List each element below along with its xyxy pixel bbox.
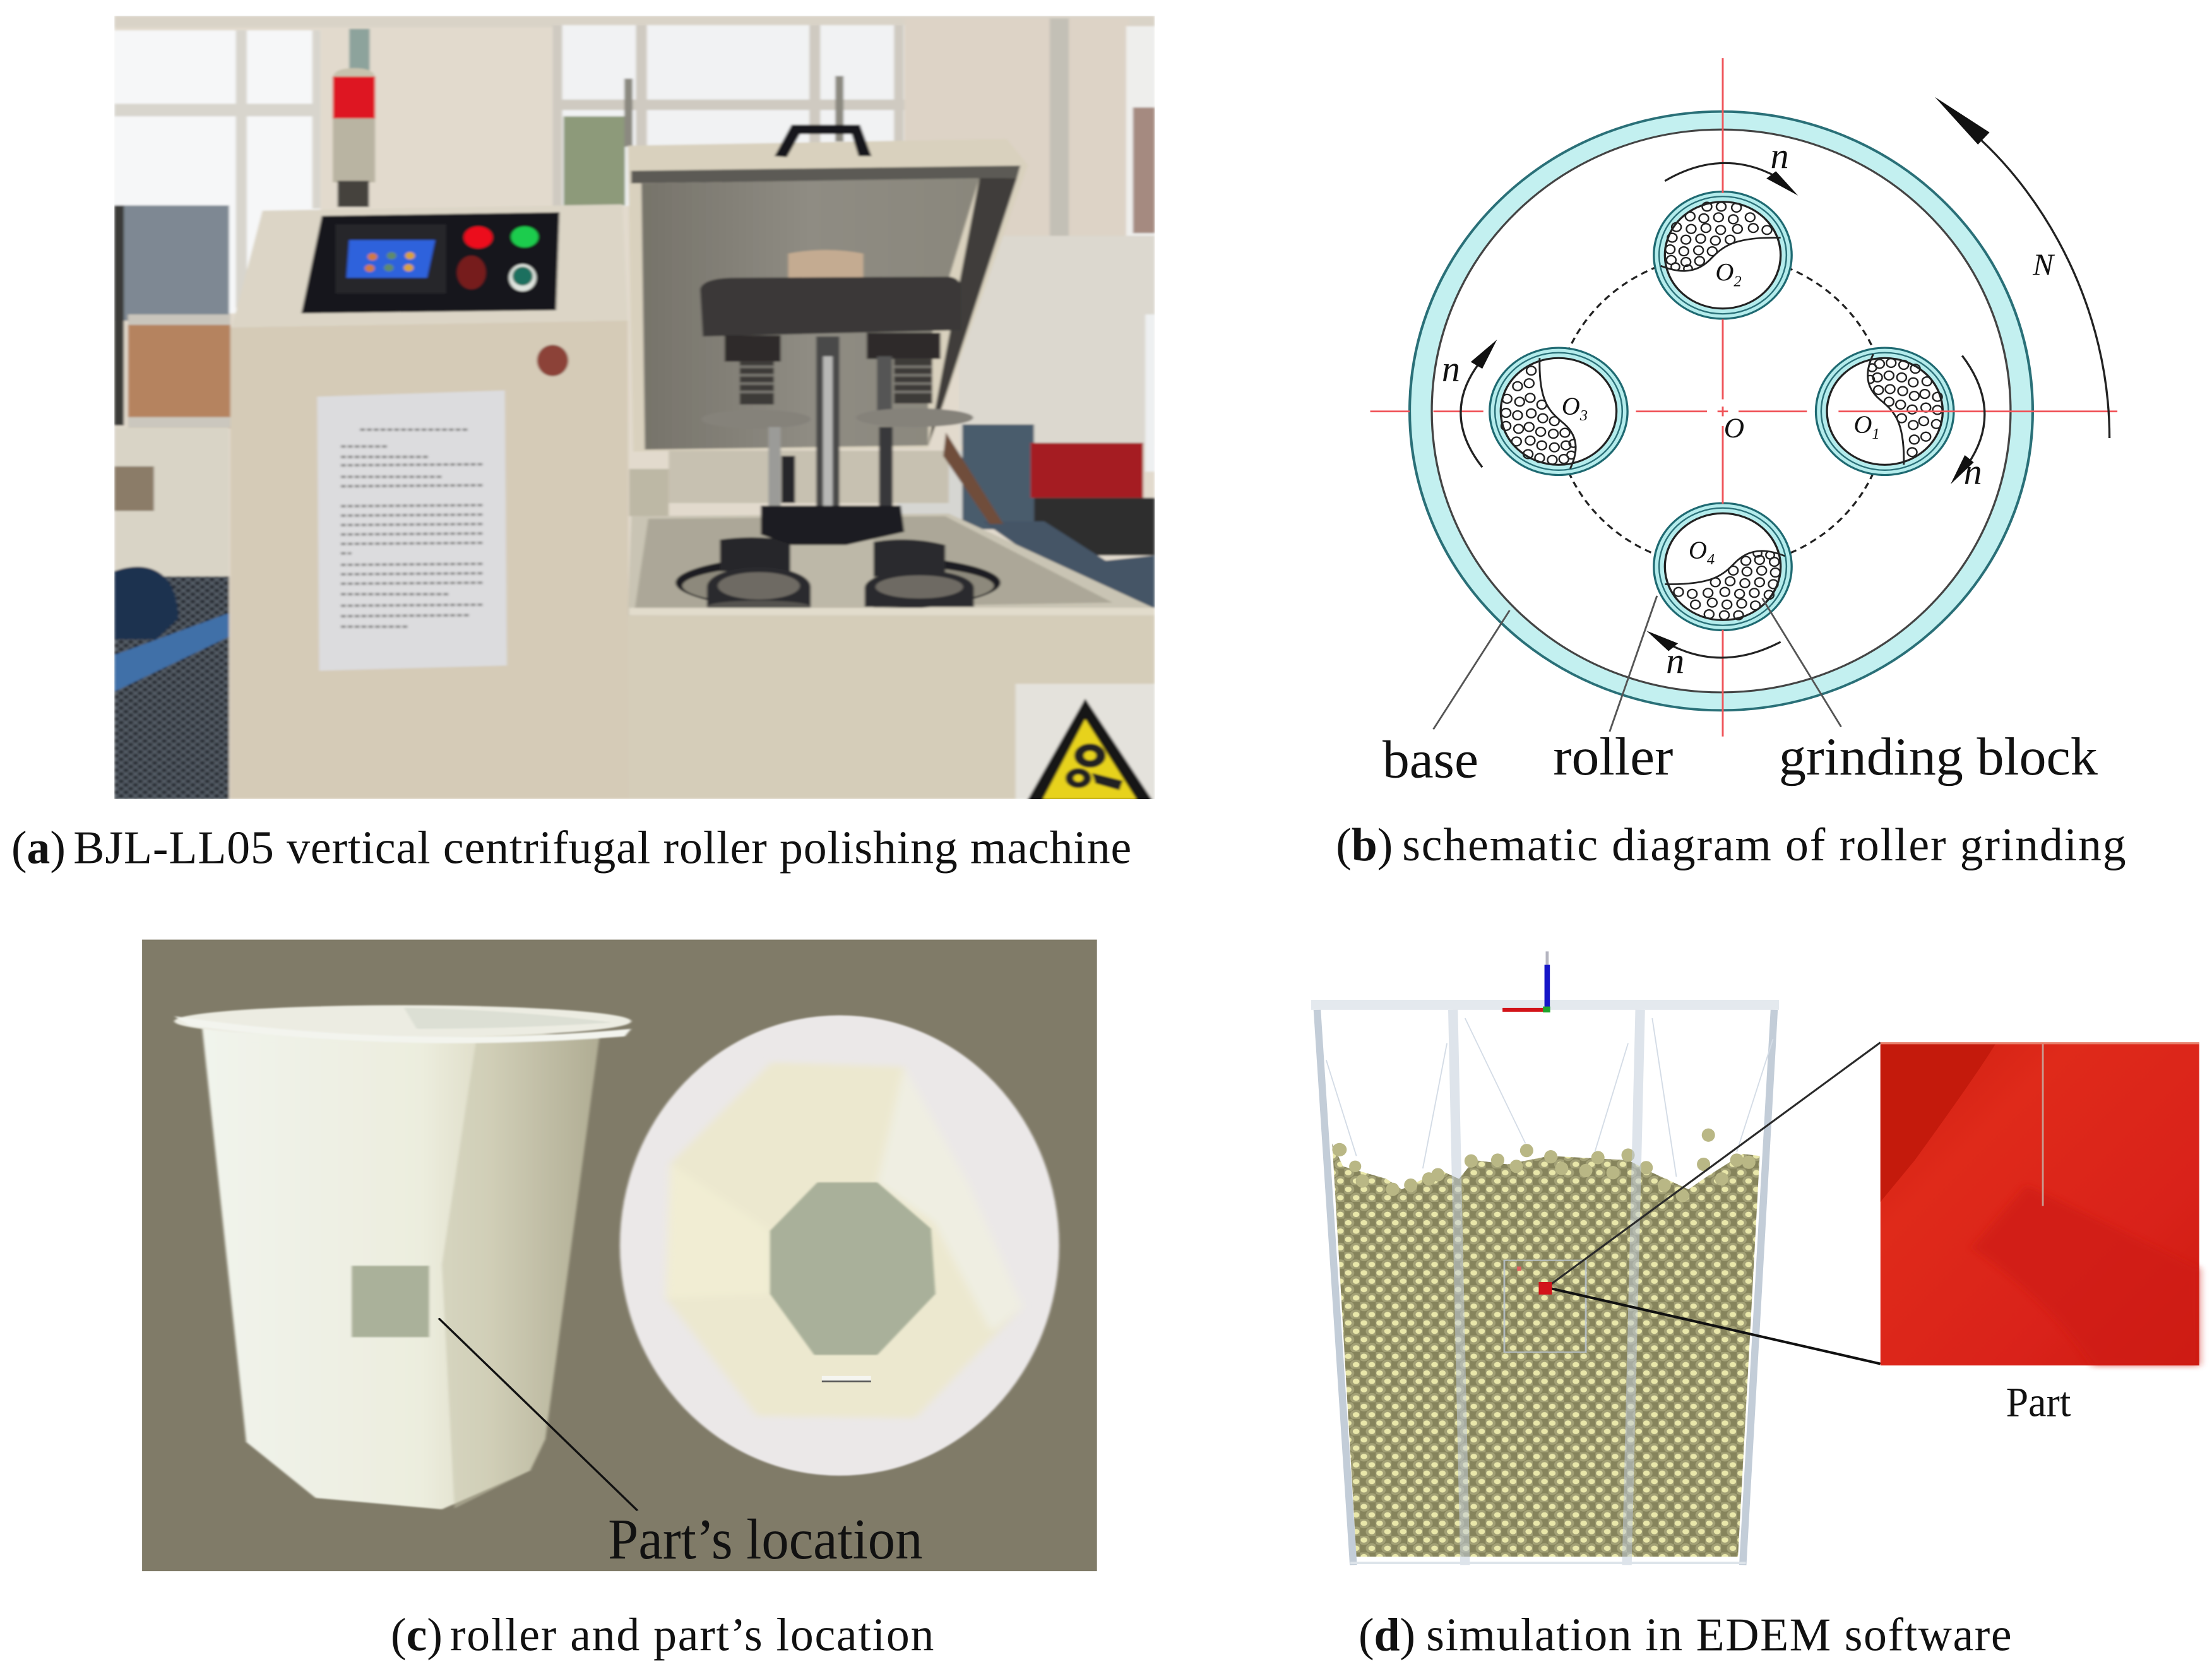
diagram symbols: O	[1715, 258, 1733, 287]
panel a: photo of polishing machine	[114, 16, 1155, 802]
right wall and window	[904, 18, 1129, 239]
grinding media	[1332, 1129, 1760, 1557]
container wireframe	[1311, 1005, 1779, 1565]
polishing head	[788, 250, 864, 278]
coordinate axes	[1502, 951, 1550, 1012]
left window	[114, 30, 321, 313]
diagram symbols: O	[1562, 392, 1580, 420]
caption d: simulation in EDEM software	[1426, 1608, 2012, 1660]
diagram symbols: 1	[1872, 425, 1880, 442]
diagram symbols: 2	[1733, 273, 1742, 290]
roller top view	[620, 1016, 1059, 1476]
lid	[627, 139, 1028, 452]
tray and rollers	[627, 514, 1153, 617]
leader line	[439, 1318, 638, 1511]
diagram symbols: O	[1689, 536, 1707, 564]
diagram symbols: n	[1964, 451, 1982, 492]
caption b: schematic diagram of roller grinding	[1402, 819, 2126, 870]
panel c: roller and part location photo	[142, 940, 1097, 1571]
caption d: (d)	[1359, 1608, 1415, 1660]
warning sign	[1016, 684, 1155, 799]
label: base: base	[1382, 730, 1478, 789]
arrowheads	[1471, 97, 1990, 651]
red axes	[1371, 58, 2117, 737]
rollers	[1490, 192, 1954, 630]
diagram symbols: 4	[1707, 551, 1715, 568]
caption b: (b)	[1336, 819, 1393, 870]
roller side view	[174, 1006, 631, 1509]
label: part's location: Part’s location	[608, 1507, 923, 1571]
diagram symbols: n	[1442, 348, 1460, 389]
right machine behind	[1048, 235, 1071, 239]
panel b: schematic diagram of roller grinding	[1371, 58, 2117, 789]
panel d: EDEM simulation	[1311, 951, 2199, 1565]
diagram symbols: O	[1853, 410, 1872, 439]
label: part: Part	[2006, 1379, 2071, 1426]
stack light	[333, 68, 375, 79]
caption a: (a)	[11, 822, 66, 874]
caption c: (c)	[391, 1608, 443, 1660]
caption a: BJL-LL05 vertical centrifugal roller polishing machine	[73, 822, 1131, 874]
label: roller: roller	[1553, 727, 1673, 787]
part close-up	[1881, 1042, 2199, 1365]
diagram symbols: N	[2032, 247, 2055, 282]
diagram symbols: n	[1666, 640, 1684, 681]
dashed orbit	[1555, 254, 1887, 567]
diagram symbols: 3	[1579, 407, 1588, 424]
callout lines and part marker	[1547, 1042, 1881, 1288]
diagram symbols	[1442, 135, 2055, 681]
lower cabinet	[627, 609, 1155, 799]
diagram symbols: O	[1724, 412, 1744, 444]
rotation arrows	[1461, 135, 2110, 658]
diagram symbols: n	[1770, 135, 1789, 176]
leader lines	[1434, 596, 1841, 732]
left equipment	[114, 205, 229, 321]
centre window	[552, 25, 904, 206]
caption c: roller and part’s location	[450, 1608, 934, 1660]
label: grinding block: grinding block	[1779, 727, 2098, 787]
instruction sheet	[317, 390, 507, 671]
base ring	[1420, 121, 2022, 701]
